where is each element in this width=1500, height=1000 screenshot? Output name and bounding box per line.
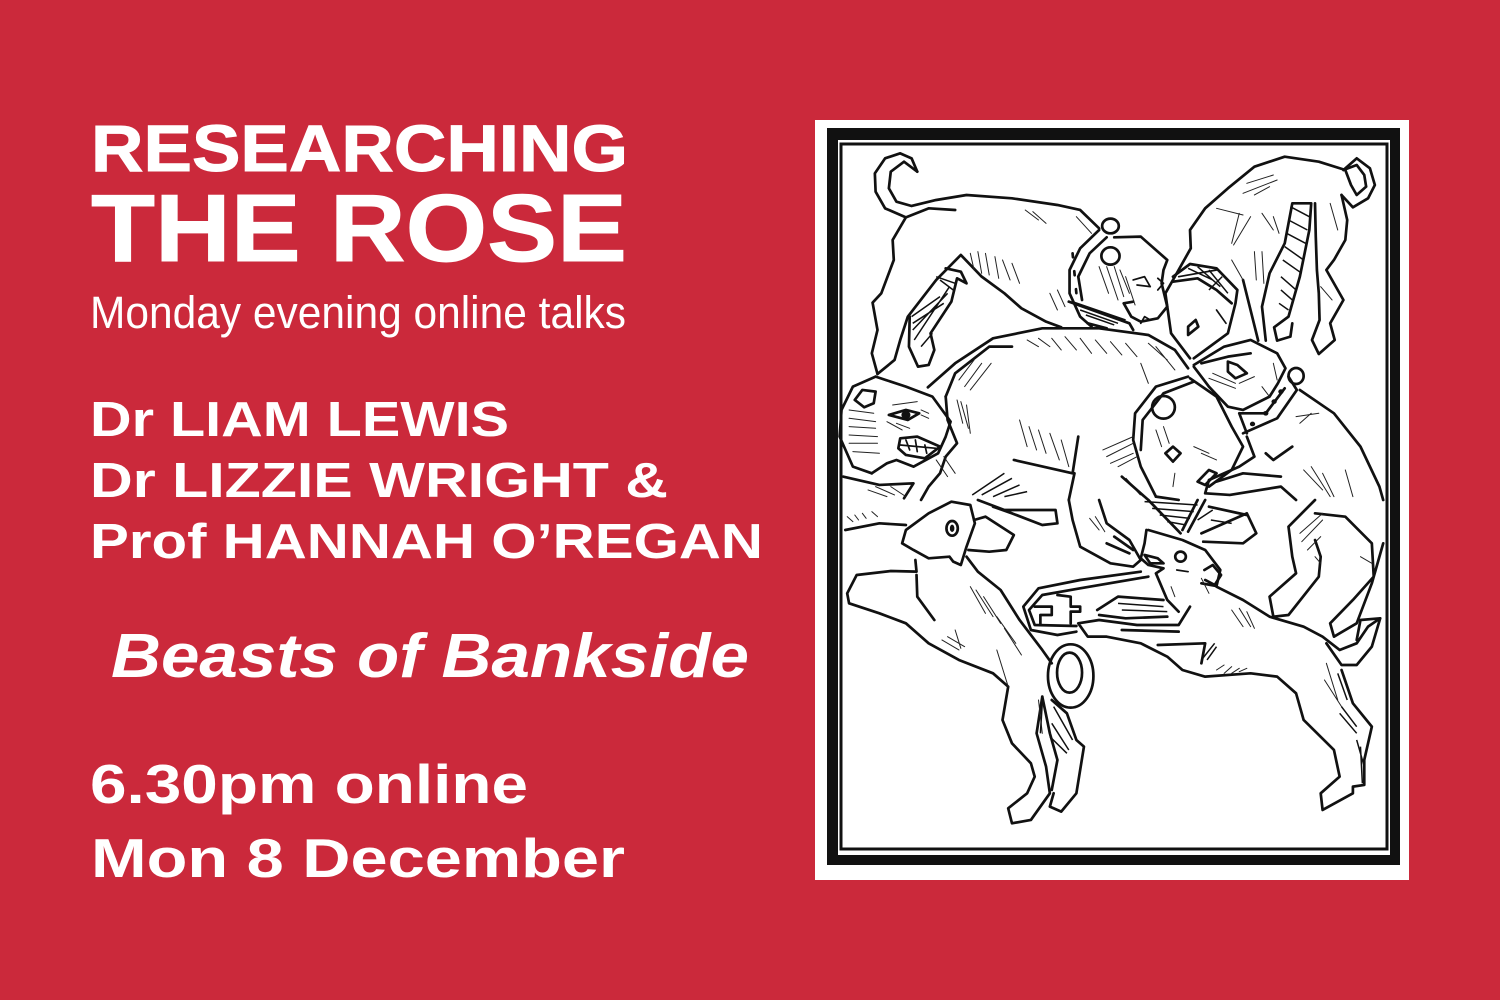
lower part of the woodcut animals — [845, 500, 1383, 823]
left dog with lion face — [840, 377, 955, 498]
date and time: 6.30pm online — [90, 753, 528, 815]
woodcut illustration of bear and dogs — [815, 120, 1409, 880]
speakers: Dr LIAM LEWIS — [90, 393, 509, 447]
title: RESEARCHING — [91, 111, 628, 185]
subtitle: Monday evening online talks — [90, 287, 626, 338]
title: THE ROSE — [91, 175, 627, 282]
bear paws and snout — [845, 500, 1256, 567]
hind legs of the right dog — [1270, 500, 1383, 637]
right dog with studded collar — [1194, 340, 1383, 500]
central bear — [921, 328, 1243, 500]
lower right leaping dog — [1023, 530, 1380, 810]
date and time: Mon 8 December — [91, 827, 625, 889]
woodcut border frame — [827, 128, 1400, 865]
speakers: Dr LIZZIE WRIGHT & — [90, 454, 668, 508]
lower left leaping dog — [847, 502, 1093, 823]
speakers: Prof HANNAH O’REGAN — [90, 515, 763, 569]
upper part of the woodcut animals — [840, 153, 1383, 500]
title — [91, 111, 628, 282]
speakers — [90, 393, 763, 569]
date and time — [90, 753, 625, 889]
talk title: Beasts of Bankside — [111, 622, 749, 691]
upper left dog — [872, 153, 1167, 374]
upper right dog — [1165, 157, 1375, 358]
